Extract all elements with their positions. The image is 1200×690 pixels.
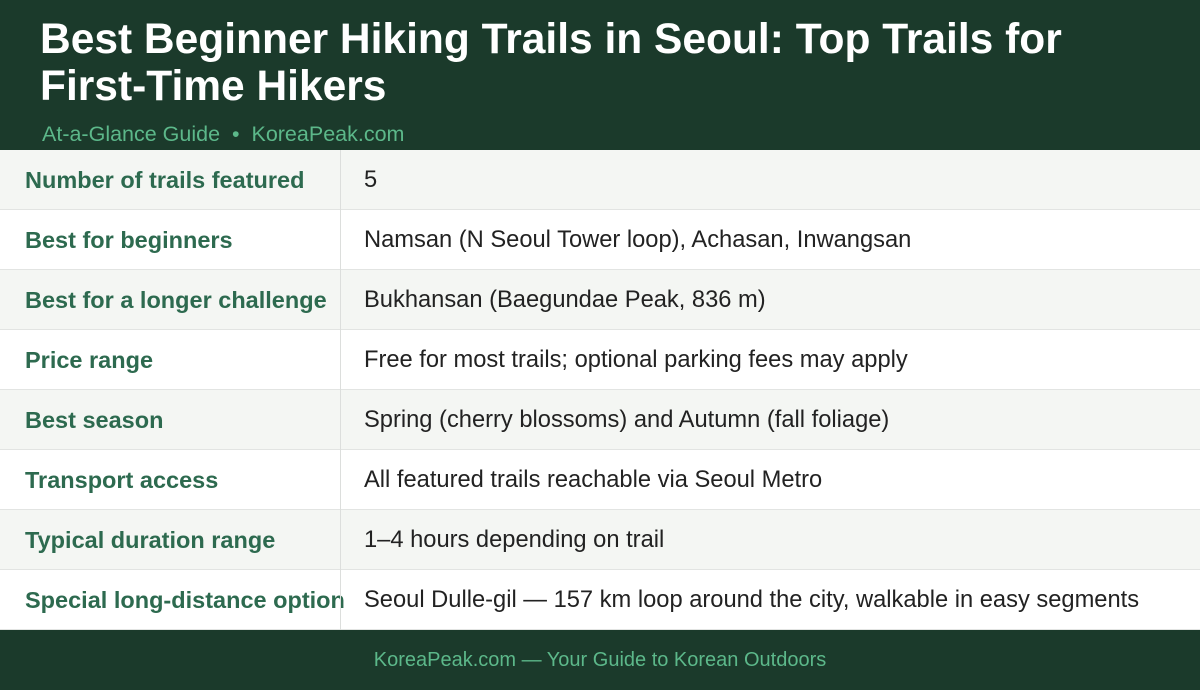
row: longer challenge: [0, 270, 1200, 330]
row: longer challenge: Bukhansan (Baegundae Peak, 836 m): [364, 287, 766, 313]
row: duration: Typical duration range: [25, 527, 275, 553]
row: number of trails: Number of trails featured: [25, 167, 304, 193]
title: Best Beginner Hiking Trails in Seoul: Top Trails for: [40, 16, 1062, 63]
row: long-distance: Special long-distance option: [25, 587, 345, 613]
row: best season: [0, 390, 1200, 450]
row: duration: [0, 510, 1200, 570]
row: price range: [0, 330, 1200, 390]
footer: [0, 630, 1200, 690]
row: long-distance: Seoul Dulle-gil — 157 km loop around the city, walkable in easy segments: [364, 587, 1139, 613]
subtitle: At-a-Glance Guide • KoreaPeak.com: [42, 122, 404, 146]
row: duration: 1–4 hours depending on trail: [364, 527, 664, 553]
row: transport: All featured trails reachable via Seoul Metro: [364, 467, 822, 493]
row: best for beginners: Namsan (N Seoul Tower loop), Achasan, Inwangsan: [364, 227, 911, 253]
row: price range: Price range: [25, 347, 153, 373]
row: best for beginners: [0, 210, 1200, 270]
row: best season: Spring (cherry blossoms) and Autumn (fall foliage): [364, 407, 889, 433]
row: best season: Best season: [25, 407, 163, 433]
row: best for beginners: Best for beginners: [25, 227, 233, 253]
row: number of trails: 5: [364, 167, 377, 193]
row: price range: Free for most trails; optional parking fees may apply: [364, 347, 908, 373]
table: [0, 150, 1200, 630]
title: First-Time Hikers: [40, 63, 386, 110]
row: number of trails: [0, 150, 1200, 210]
row: transport: Transport access: [25, 467, 218, 493]
footer: KoreaPeak.com — Your Guide to Korean Outdoors: [374, 649, 826, 671]
title: [40, 16, 1062, 110]
header: [0, 0, 1200, 150]
row: longer challenge: Best for a longer challenge: [25, 287, 327, 313]
row: long-distance: [0, 570, 1200, 630]
row: transport: [0, 450, 1200, 510]
